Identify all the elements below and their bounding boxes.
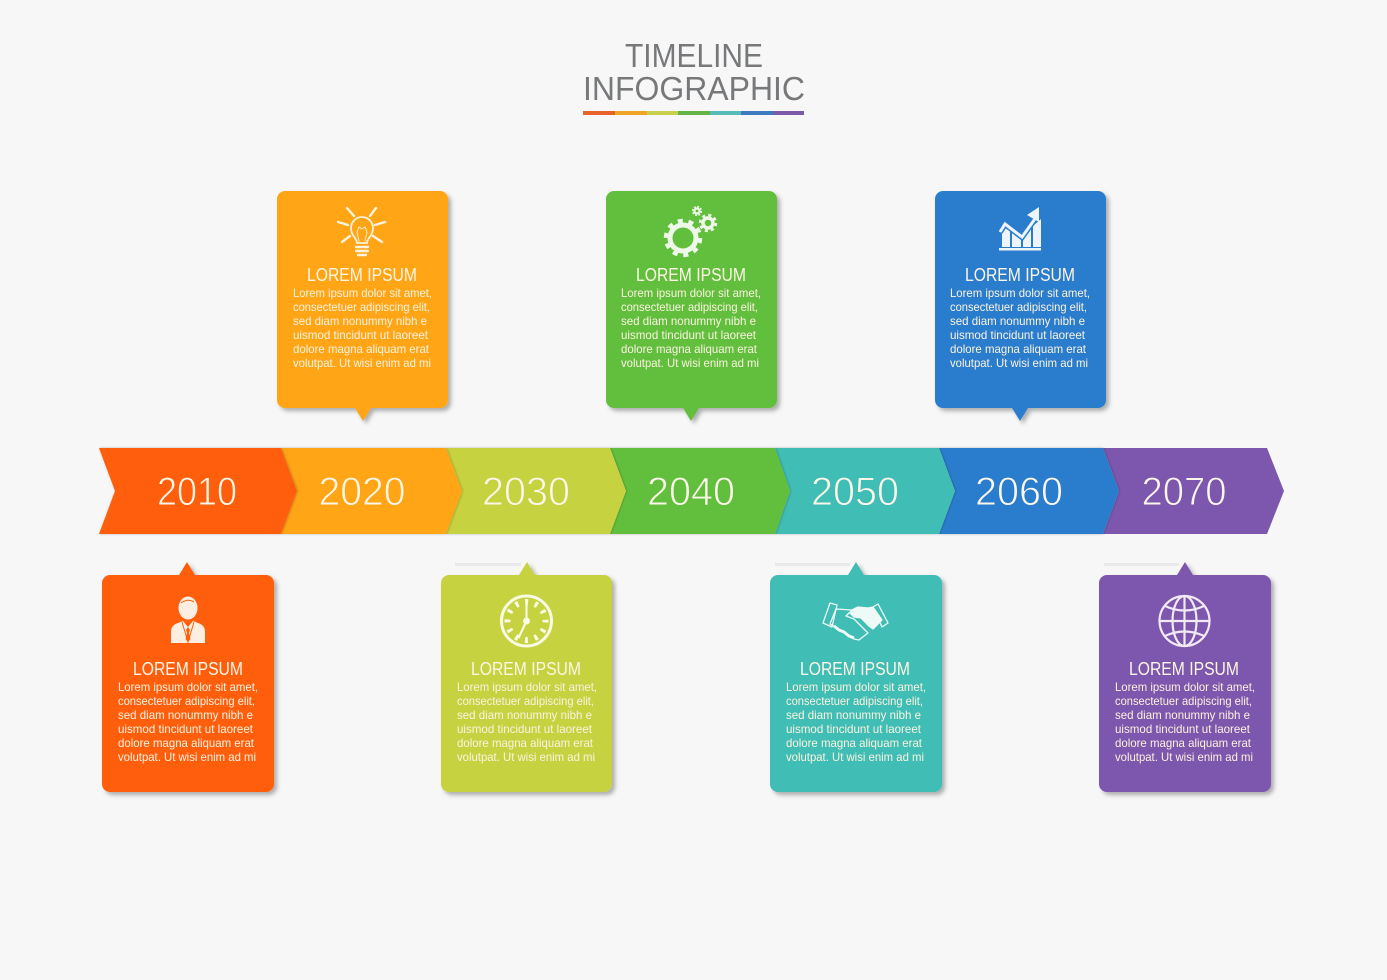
icon: gears — [666, 207, 716, 255]
body text: Lorem ipsum dolor sit amet, — [457, 680, 597, 694]
arrow 2030 — [446, 448, 626, 534]
body text — [786, 680, 926, 764]
body text: dolore magna aliquam erat — [457, 736, 594, 750]
body text: volutpat. Ut wisi enim ad mi — [118, 750, 256, 764]
body text: dolore magna aliquam erat — [118, 736, 255, 750]
icon: globe — [1160, 596, 1210, 646]
body text: uismod tincidunt ut laoreet — [293, 328, 429, 342]
arrow 2010: 2010 — [157, 470, 237, 514]
body text: Lorem ipsum dolor sit amet, — [293, 286, 432, 300]
body text: uismod tincidunt ut laoreet — [457, 722, 593, 736]
arrow 2030: 2030 — [482, 470, 570, 514]
body text — [621, 286, 761, 370]
body text: volutpat. Ut wisi enim ad mi — [950, 356, 1088, 370]
title rainbow underline — [583, 111, 804, 115]
body text: volutpat. Ut wisi enim ad mi — [1115, 750, 1253, 764]
icon: business person — [171, 596, 205, 643]
body text: volutpat. Ut wisi enim ad mi — [621, 356, 759, 370]
arrow 2040: 2040 — [647, 470, 735, 514]
arrow 2040 — [610, 448, 790, 534]
panel: 2070 card — [1099, 562, 1271, 792]
icon: handshake — [823, 603, 888, 640]
body text: volutpat. Ut wisi enim ad mi — [457, 750, 595, 764]
body text: sed diam nonummy nibh e — [293, 314, 427, 328]
panel: 2040 card — [606, 191, 777, 421]
arrow 2070: 2070 — [1142, 470, 1226, 514]
body text: uismod tincidunt ut laoreet — [786, 722, 922, 736]
panel: 2020 card — [277, 191, 448, 421]
body text: volutpat. Ut wisi enim ad mi — [293, 356, 431, 370]
heading: LOREM IPSUM — [965, 265, 1075, 285]
body text: dolore magna aliquam erat — [621, 342, 758, 356]
panel: 2060 card — [935, 191, 1106, 421]
body text: sed diam nonummy nibh e — [621, 314, 756, 328]
body text — [1115, 680, 1255, 764]
body text: consectetuer adipiscing elit, — [293, 300, 430, 314]
icon: clock — [502, 596, 552, 646]
body text — [118, 680, 258, 764]
body text: dolore magna aliquam erat — [950, 342, 1087, 356]
body text: Lorem ipsum dolor sit amet, — [786, 680, 926, 694]
body text: consectetuer adipiscing elit, — [1115, 694, 1252, 708]
icon: rising chart — [999, 207, 1041, 250]
timeline arrow band — [99, 448, 1284, 534]
body text: uismod tincidunt ut laoreet — [118, 722, 254, 736]
icon: light bulb — [338, 208, 385, 255]
body text — [293, 286, 432, 370]
heading: LOREM IPSUM — [307, 265, 417, 285]
body text: uismod tincidunt ut laoreet — [621, 328, 757, 342]
body text: sed diam nonummy nibh e — [1115, 708, 1250, 722]
body text: uismod tincidunt ut laoreet — [1115, 722, 1251, 736]
heading: LOREM IPSUM — [800, 659, 910, 679]
arrow 2050: 2050 — [811, 470, 899, 514]
body text — [457, 680, 597, 764]
panel: 2010 card — [102, 562, 274, 792]
arrow 2070 — [1103, 448, 1284, 534]
body text: consectetuer adipiscing elit, — [457, 694, 594, 708]
body text: uismod tincidunt ut laoreet — [950, 328, 1086, 342]
body text: dolore magna aliquam erat — [1115, 736, 1252, 750]
heading: LOREM IPSUM — [133, 659, 243, 679]
title: INFOGRAPHIC — [583, 70, 805, 107]
body text: Lorem ipsum dolor sit amet, — [118, 680, 258, 694]
body text: consectetuer adipiscing elit, — [950, 300, 1087, 314]
body text: Lorem ipsum dolor sit amet, — [950, 286, 1090, 300]
body text: sed diam nonummy nibh e — [950, 314, 1085, 328]
body text: consectetuer adipiscing elit, — [621, 300, 758, 314]
body text: sed diam nonummy nibh e — [457, 708, 592, 722]
heading: LOREM IPSUM — [1129, 659, 1239, 679]
title: TIMELINE — [625, 37, 763, 74]
arrow 2020 — [281, 448, 462, 534]
body text: dolore magna aliquam erat — [786, 736, 923, 750]
arrow 2010 — [99, 448, 297, 534]
heading: LOREM IPSUM — [471, 659, 581, 679]
panel: 2030 card — [441, 562, 612, 792]
arrow 2050 — [775, 448, 955, 534]
heading: LOREM IPSUM — [636, 265, 746, 285]
arrow 2060: 2060 — [975, 470, 1063, 514]
body text: consectetuer adipiscing elit, — [786, 694, 923, 708]
panel: 2050 card — [770, 562, 942, 792]
body text: sed diam nonummy nibh e — [118, 708, 253, 722]
body text: volutpat. Ut wisi enim ad mi — [786, 750, 924, 764]
arrow 2020: 2020 — [318, 470, 406, 514]
body text — [950, 286, 1090, 370]
arrow 2060 — [939, 448, 1119, 534]
body text: Lorem ipsum dolor sit amet, — [1115, 680, 1255, 694]
body text: sed diam nonummy nibh e — [786, 708, 921, 722]
body text: consectetuer adipiscing elit, — [118, 694, 255, 708]
body text: dolore magna aliquam erat — [293, 342, 430, 356]
title — [583, 37, 805, 107]
body text: Lorem ipsum dolor sit amet, — [621, 286, 761, 300]
